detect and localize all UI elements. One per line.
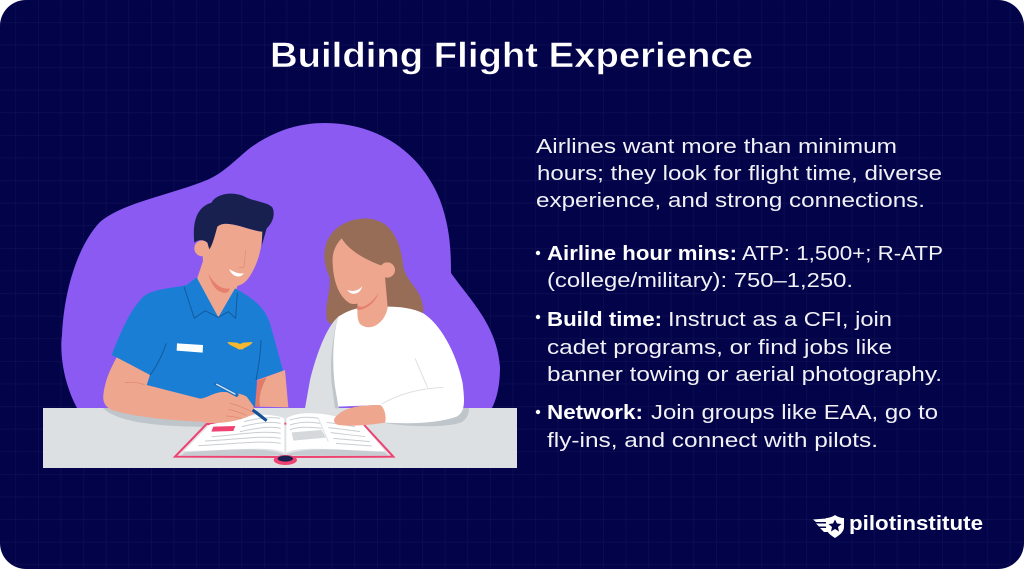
chin shadow: [208, 273, 230, 293]
sweater: [333, 307, 464, 423]
table shadows under arms: [103, 408, 469, 427]
man: pilot in blue polo: [103, 194, 288, 423]
bullet: network: Join groups like EAA, go to: [651, 401, 938, 424]
bullet: build time: Build time:: [547, 308, 662, 331]
collar and seams: [149, 287, 261, 380]
polo shirt: [112, 277, 283, 407]
page text lines: [198, 417, 372, 446]
book spine: [274, 455, 297, 465]
arm and finger lines: [125, 382, 252, 419]
smile: [347, 286, 362, 294]
cardigan: [305, 317, 338, 408]
writing arm: [103, 357, 255, 423]
bullet: build time: Instruct as a CFI, join: [668, 308, 892, 331]
ear: [194, 240, 210, 256]
face: [333, 238, 385, 304]
nose: [239, 250, 246, 268]
intro paragraph: experience, and strong connections.: [536, 189, 925, 212]
bullet: airline hour mins: ATP: 1,500+; R-ATP: [742, 242, 943, 265]
purple blob backdrop: [61, 123, 500, 408]
neck: [357, 277, 388, 327]
neck: [197, 260, 240, 317]
pen: [216, 384, 267, 421]
woman: student in white sweater: [305, 218, 464, 426]
hair: [194, 194, 274, 249]
icon: winged shield: [813, 515, 844, 538]
face: [203, 224, 262, 287]
smile: [229, 269, 244, 277]
intro paragraph: hours; they look for flight time, diverse: [537, 162, 942, 185]
table: [43, 408, 517, 468]
neck shadow: [357, 293, 379, 310]
bullet: network: [536, 401, 938, 452]
ear: [380, 262, 395, 278]
pilot institute logo: [813, 512, 983, 538]
bullet: airline hour mins: [536, 242, 943, 292]
bullet: airline hour mins: (college/military): 750–1,250.: [547, 269, 853, 292]
name badge: [177, 343, 203, 353]
pilot institute logo: pilotinstitute: [849, 512, 983, 535]
far arm: [257, 370, 288, 407]
bullet: build time: banner towing or aerial photography.: [547, 363, 942, 386]
bullet: build time: [536, 308, 942, 386]
bullet: network: Network:: [547, 401, 643, 424]
intro paragraph: Airlines want more than minimum: [536, 135, 897, 158]
bullet: build time: cadet programs, or find jobs like: [547, 336, 892, 359]
bullet: airline hour mins: Airline hour mins:: [547, 242, 737, 265]
intro paragraph: [536, 135, 942, 212]
bullet: network: fly-ins, and connect with pilots.: [547, 429, 878, 452]
illustration: pilot and student studying: [43, 123, 517, 468]
title: Building Flight Experience: [270, 35, 753, 75]
wings badge: [227, 342, 253, 349]
hand on book: [334, 405, 386, 426]
open book: [175, 413, 393, 465]
hair: [324, 218, 423, 327]
sleeve creases: [382, 358, 443, 404]
